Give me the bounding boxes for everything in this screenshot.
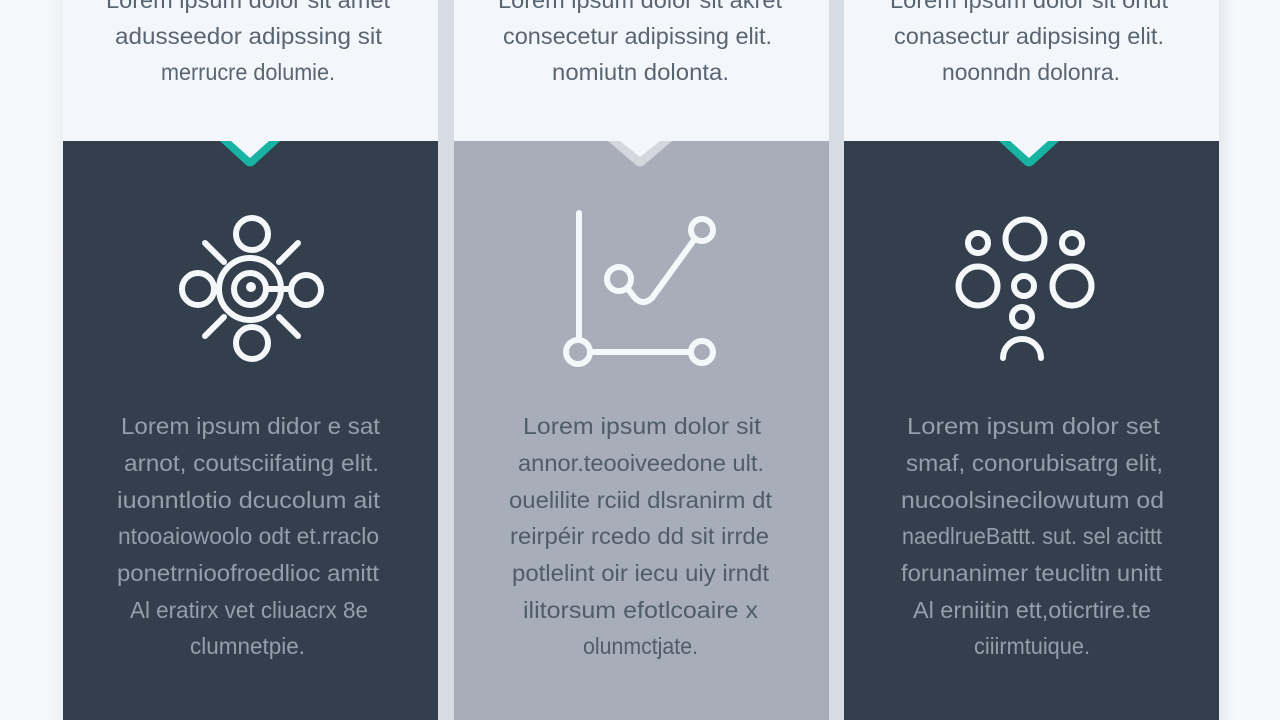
column 1 body text: ntooaiowoolo odt et.rraclo	[118, 523, 379, 549]
column 1 teal chevron	[220, 141, 280, 166]
column 2 body text: potlelint oir iecu uiy irndt	[512, 560, 769, 586]
column 1 body text: Lorem ipsum didor e sat	[121, 413, 380, 439]
icon: network hub	[182, 218, 321, 359]
column 1 body text: clumnetpie.	[190, 633, 305, 659]
column 2 body text: Lorem ipsum dolor sit	[523, 413, 761, 439]
column 3 body text: ciiirmtuique.	[974, 633, 1090, 659]
column 3 body text: Lorem ipsum dolor set	[907, 413, 1160, 439]
column 1 body text: ponetrnioofroedlioc amitt	[117, 560, 379, 586]
column 3 body text: nucoolsinecilowutum od	[901, 487, 1164, 513]
column 2 intro text: consecetur adipissing elit.	[503, 23, 772, 49]
column 2 body text: olunmctjate.	[583, 633, 698, 659]
column 2 grey panel	[454, 141, 829, 720]
column 2 body text: annor.teooiveedone ult.	[518, 450, 764, 476]
column 2 intro text: nomiutn dolonta.	[552, 59, 729, 85]
column 3 body text: smaf, conorubisatrg elit,	[906, 450, 1163, 476]
column 3 top card	[844, 0, 1219, 141]
column 2 body text	[509, 413, 772, 659]
column 1 intro text	[106, 0, 390, 85]
column 1 top card	[63, 0, 438, 141]
column 3 intro text	[890, 0, 1168, 85]
column 1 body text: iuonntlotio dcucolum ait	[117, 487, 381, 513]
column 2 top card	[454, 0, 829, 141]
column 3 intro text: conasectur adipsising elit.	[894, 23, 1164, 49]
column 1 body text: Al eratirx vet cliuacrx 8e	[130, 597, 368, 623]
column 1 dark panel	[63, 141, 438, 720]
column 2 intro text	[498, 0, 782, 85]
column 1 body text	[117, 413, 381, 659]
icon: line chart	[566, 213, 713, 364]
panel: column 1	[63, 0, 438, 720]
column 2 grey chevron	[608, 141, 672, 166]
panel: column 2	[454, 0, 829, 720]
icon: circle cluster	[958, 220, 1092, 358]
column 3 body text	[901, 413, 1164, 659]
column 1 body text: arnot, coutsciifating elit.	[124, 450, 379, 476]
column 3 dark panel	[844, 141, 1219, 720]
column 1 intro text: adusseedor adipssing sit	[115, 23, 382, 49]
column 2 body text: reirpéir rcedo dd sit irrde	[510, 523, 769, 549]
column 3 body text: naedlrueBattt. sut. sel acittt	[902, 523, 1162, 549]
column 3 intro text: noonndn dolonra.	[942, 59, 1120, 85]
column 2 body text: ilitorsum efotlcoaire x	[523, 597, 758, 623]
column 3 body text: Al erniitin ett,oticrtire.te	[913, 597, 1151, 623]
column 1 intro text: merrucre dolumie.	[161, 59, 335, 85]
column 3 body text: forunanimer teuclitn unitt	[901, 560, 1162, 586]
panel: column 3	[844, 0, 1219, 720]
column 2 body text: ouelilite rciid dlsranirm dt	[509, 487, 772, 513]
column 3 teal chevron	[999, 141, 1059, 166]
